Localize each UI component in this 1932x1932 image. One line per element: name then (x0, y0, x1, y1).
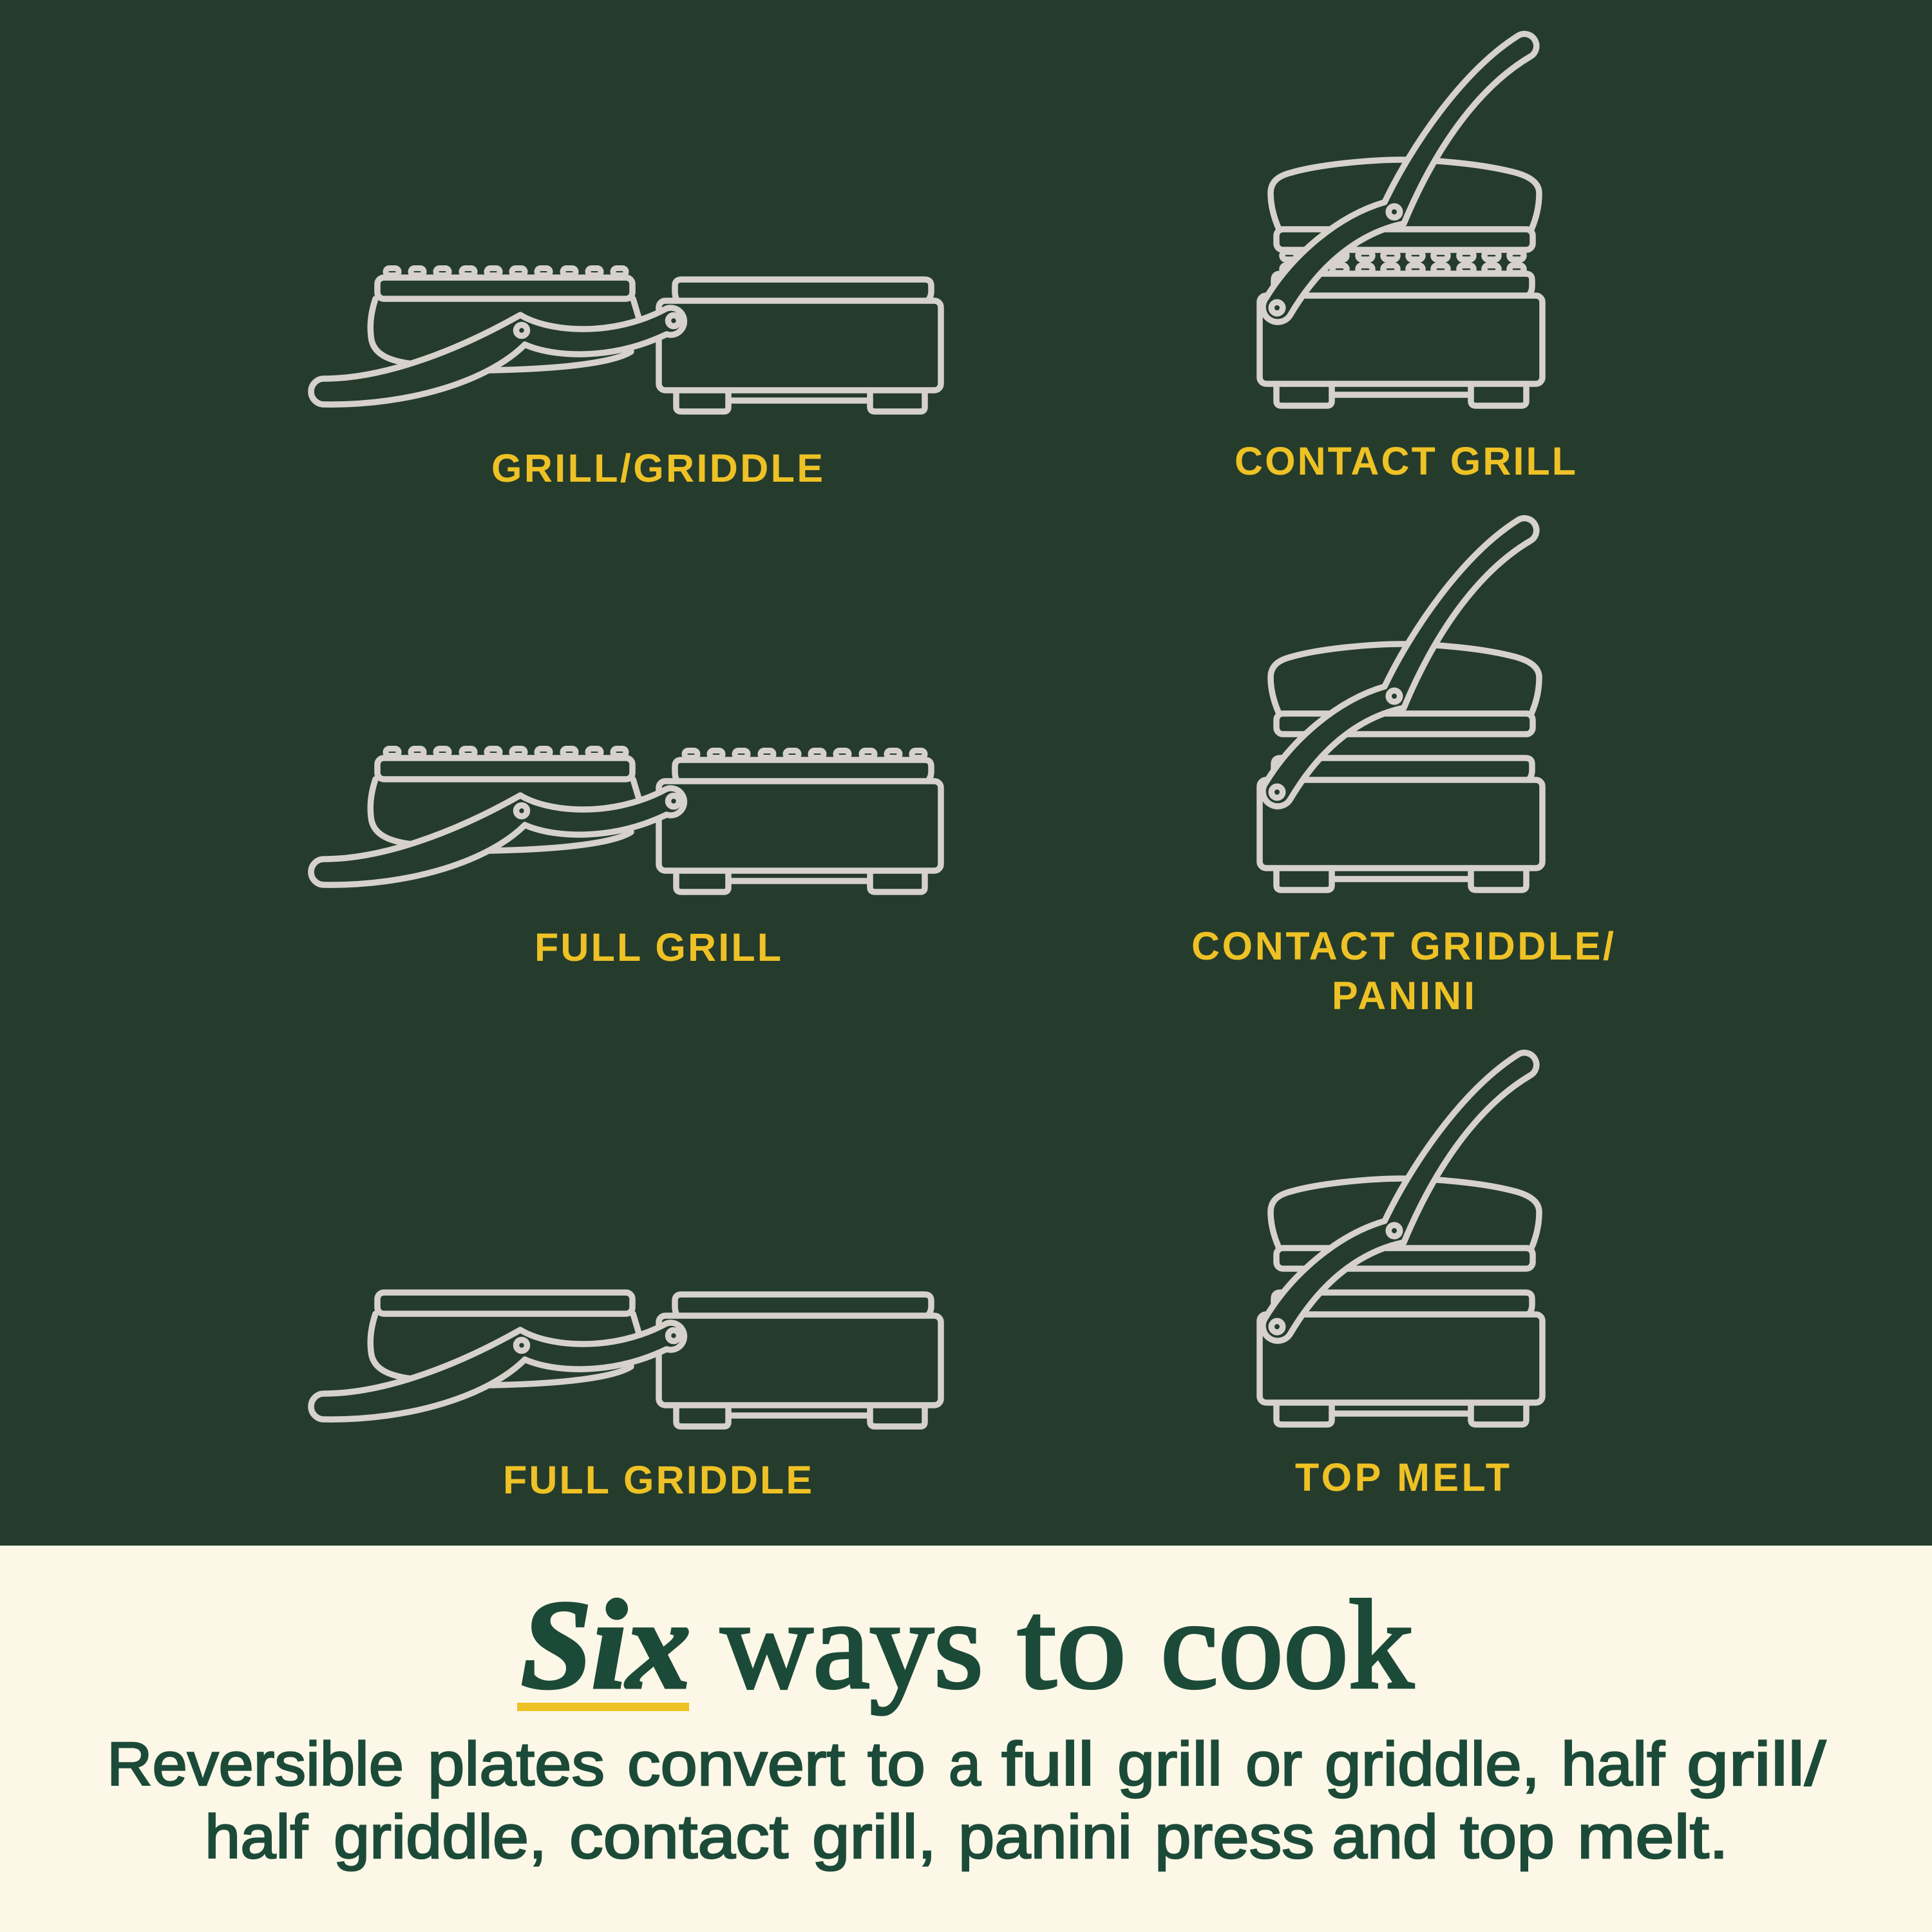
dark green panel (0, 0, 1932, 1546)
subtitle text: and (1332, 1803, 1438, 1871)
subtitle text: plates (428, 1730, 605, 1799)
subtitle text: grill/ (1687, 1730, 1826, 1799)
title: Six (521, 1574, 690, 1715)
label: top melt: TOP MELT (1295, 1455, 1510, 1499)
subtitle text: contact (569, 1803, 788, 1871)
subtitle text: griddle, (1325, 1730, 1540, 1799)
label: contact griddle/panini: CONTACT GRIDDLE/ (1191, 924, 1614, 968)
subtitle text: melt. (1577, 1803, 1728, 1871)
subtitle text: press (1155, 1803, 1314, 1871)
subtitle text: to (867, 1730, 925, 1799)
icon: full griddle open (311, 1293, 941, 1426)
title (521, 1574, 1414, 1715)
title: cook (1160, 1574, 1414, 1715)
label: contact griddle/panini: PANINI (1332, 974, 1475, 1018)
subtitle text: grill, (812, 1803, 936, 1871)
icon: contact grill (1260, 34, 1542, 406)
subtitle text: a (949, 1730, 981, 1799)
subtitle text: half (1561, 1730, 1665, 1799)
icon: grill/griddle open (311, 268, 941, 412)
subtitle text: full (1001, 1730, 1094, 1799)
label: grill/griddle: GRILL/GRIDDLE (491, 446, 823, 490)
icon: contact griddle/panini (1260, 518, 1542, 890)
subtitle text: top (1460, 1803, 1555, 1871)
icon: full grill open (311, 748, 941, 892)
subtitle text: Reversible (107, 1730, 404, 1799)
icon: top melt (1260, 1053, 1542, 1425)
title: ways (721, 1574, 983, 1715)
subtitle text: panini (958, 1803, 1132, 1871)
label: contact grill: CONTACT GRILL (1235, 439, 1576, 483)
subtitle text: convert (627, 1730, 845, 1799)
subtitle text: or (1245, 1730, 1302, 1799)
subtitle text: half (205, 1803, 308, 1871)
cream footer panel (0, 1546, 1932, 1932)
label: contact griddle/panini (1191, 924, 1614, 1018)
subtitle text: griddle, (334, 1803, 547, 1871)
title underline (517, 1703, 689, 1711)
title: to (1018, 1574, 1126, 1715)
subtitle text: grill (1117, 1730, 1222, 1799)
label: full griddle: FULL GRIDDLE (503, 1458, 812, 1502)
subtitle text (107, 1730, 1826, 1871)
label: full grill: FULL GRILL (535, 925, 781, 969)
